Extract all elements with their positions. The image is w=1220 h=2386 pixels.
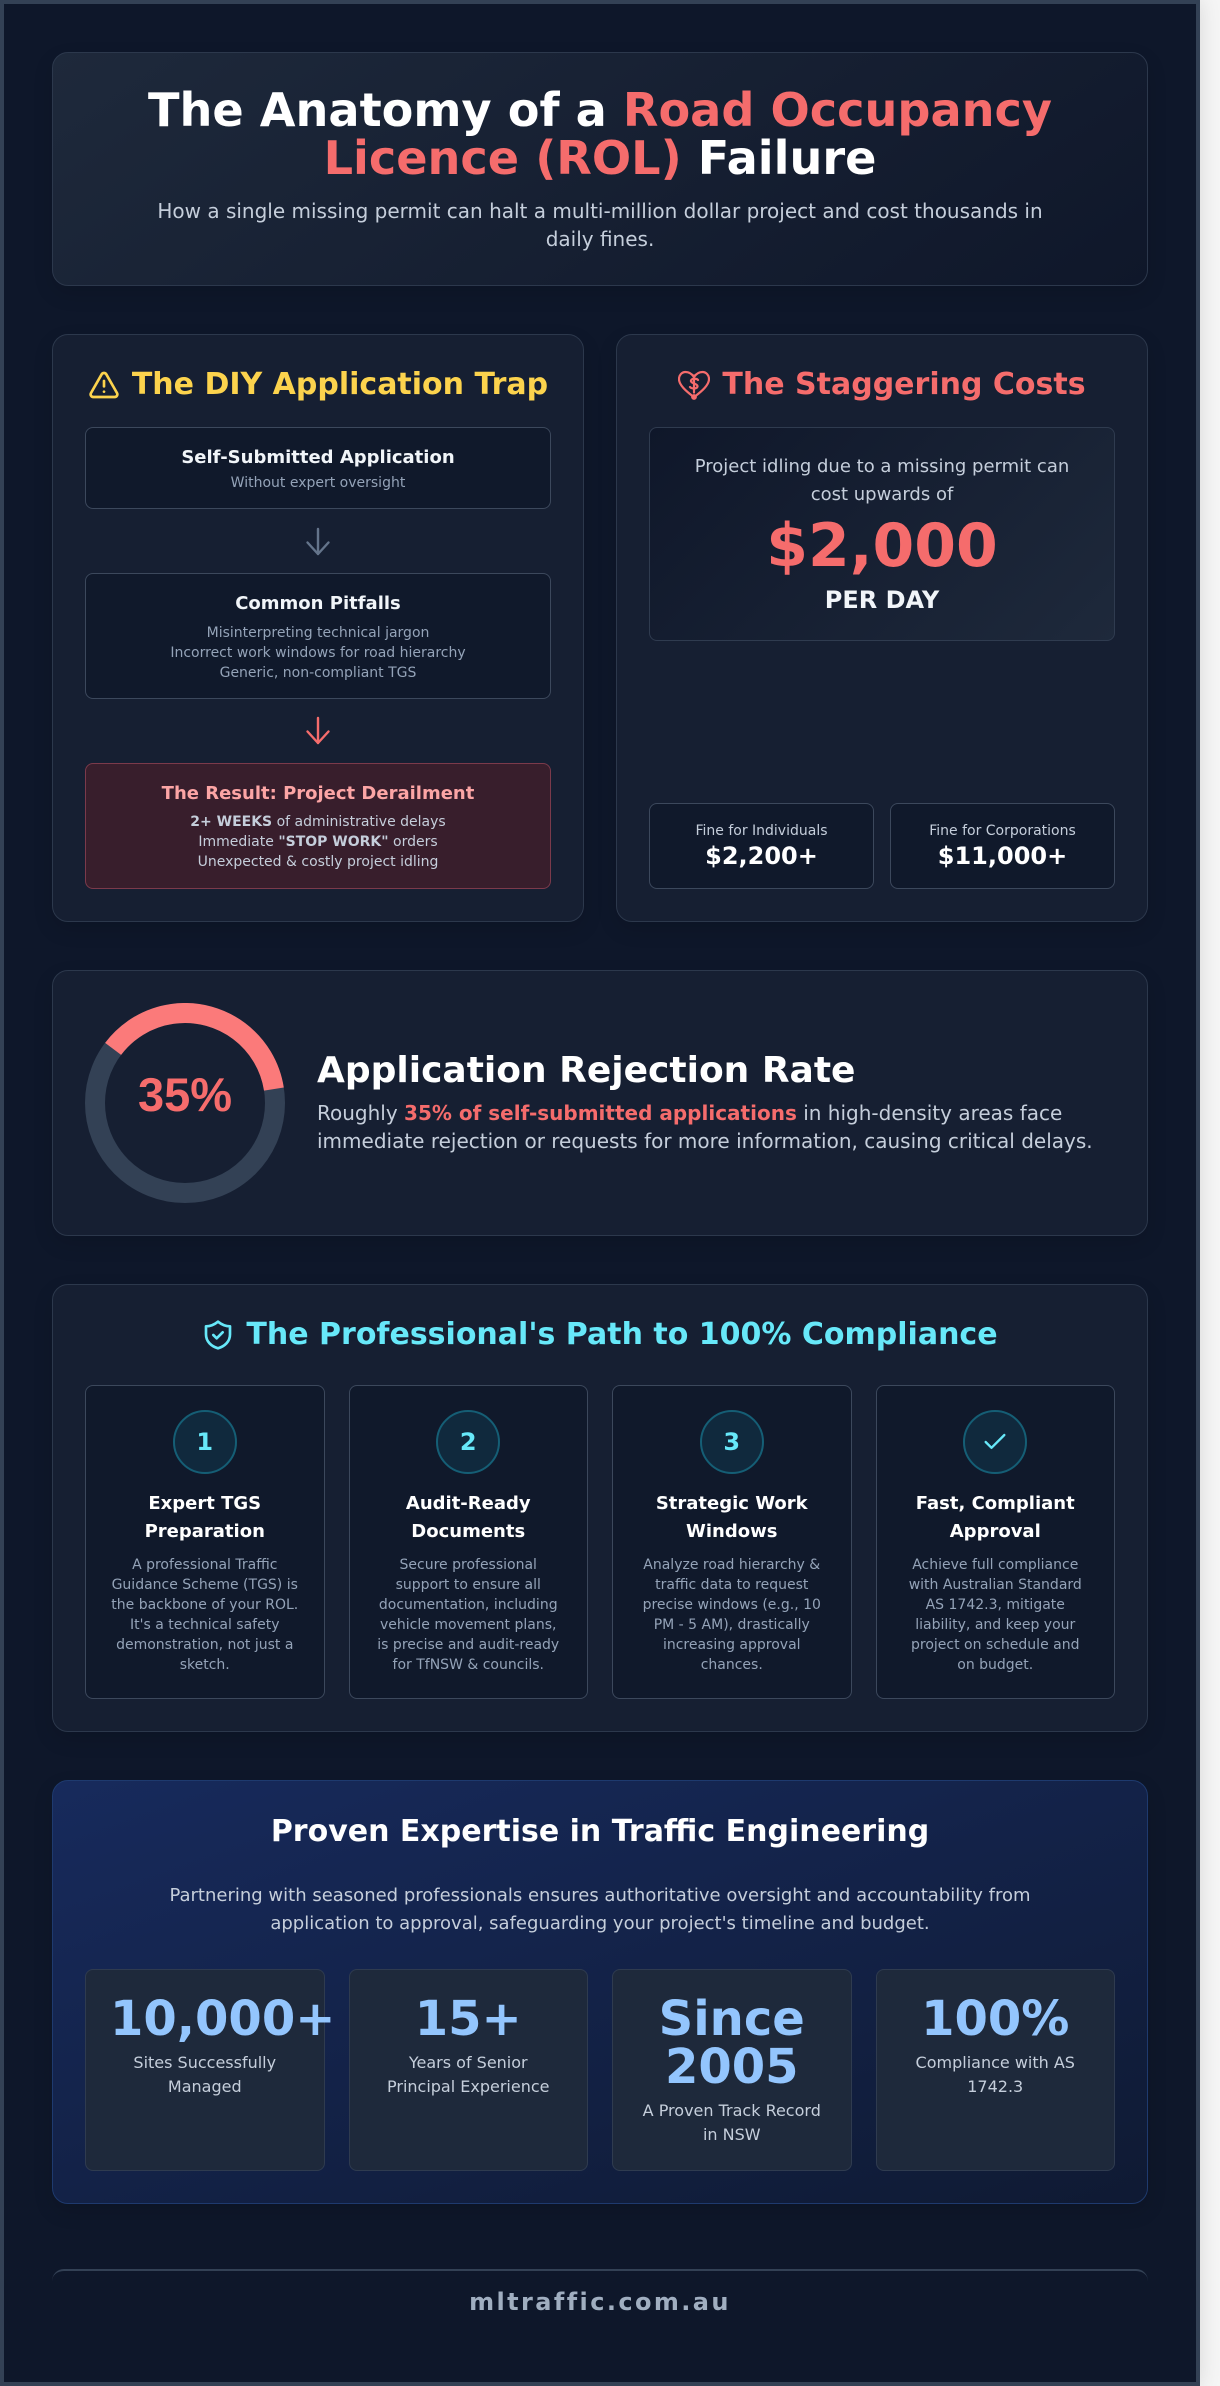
heading: DIY application trap: The DIY Application Trap: [132, 367, 548, 402]
stat: sites managed: Sites Successfully: [133, 2053, 276, 2072]
expertise text: [169, 1885, 1031, 1934]
flow step: project derailment result: [85, 763, 551, 889]
panel: DIY application trap: [52, 334, 584, 922]
step 2 card: documentation, including: [379, 1597, 558, 1613]
step 2 card: is precise and audit-ready: [377, 1637, 559, 1653]
step 1 card: Preparation: [145, 1521, 265, 1542]
website address: mltraffic.com.au: [469, 2288, 731, 2316]
step 3 card: traffic data to request: [655, 1577, 808, 1593]
step 3 card: increasing approval: [663, 1637, 801, 1653]
donut chart: 35 percent: [85, 1003, 285, 1203]
step 4 card: [876, 1385, 1115, 1699]
callout: cost per day: [649, 427, 1115, 641]
fine card: corporations: Fine for Corporations: [929, 823, 1076, 839]
panel: application rejection rate: [52, 970, 1148, 1236]
stat: years experience: [348, 1969, 588, 2171]
step 4 card: liability, and keep your: [915, 1617, 1075, 1633]
step 4 card: on budget.: [957, 1657, 1033, 1673]
fine card: corporations: [890, 803, 1115, 889]
per day label: PER DAY: [825, 586, 939, 614]
title: [148, 83, 1052, 185]
step 3 card: PM - 5 AM), drastically: [654, 1617, 810, 1633]
step 1 card: Expert TGS: [148, 1493, 261, 1514]
step 3 card: Analyze road hierarchy &: [643, 1557, 820, 1573]
heading: path to compliance: The Professional's Path to 100% Compliance: [246, 1317, 998, 1352]
step 1 card: demonstration, not just a: [116, 1637, 293, 1653]
fine card: individuals: [649, 803, 874, 889]
fine card: corporations: $11,000+: [938, 842, 1067, 870]
flow step: common pitfalls: Incorrect work windows for road hierarchy: [170, 645, 466, 661]
step 2 card: [348, 1385, 588, 1699]
stat: since 2005: A Proven Track Record: [643, 2101, 821, 2120]
flow step: common pitfalls: Misinterpreting technical jargon: [207, 625, 429, 641]
step 1 card: 1: [196, 1428, 213, 1456]
flow step: project derailment result: 2+ WEEKS of administrative delays: [190, 814, 446, 830]
step 2 card: Documents: [411, 1521, 525, 1542]
step 1 card: the backbone of your ROL.: [111, 1597, 298, 1613]
step 1 card: sketch.: [180, 1657, 230, 1673]
panel: proven expertise: [52, 1780, 1148, 2204]
step 2 card: Secure professional: [400, 1557, 537, 1573]
fine card: individuals: $2,200+: [705, 842, 818, 870]
flow step: common pitfalls: Generic, non-compliant TGS: [220, 665, 416, 681]
rejection heading: Application Rejection Rate: [317, 1050, 855, 1091]
stat: since 2005: in NSW: [703, 2125, 761, 2144]
fine card: individuals: Fine for Individuals: [695, 823, 828, 839]
step 1 card: [85, 1385, 324, 1699]
step 2 card: 2: [460, 1428, 477, 1456]
step 3 card: Strategic Work: [656, 1493, 808, 1514]
stat: since 2005: Since: [659, 1991, 805, 2047]
subtitle: How a single missing permit can halt a multi-million dollar project and cost thousands in: [157, 199, 1043, 223]
heading: staggering costs: The Staggering Costs: [722, 367, 1086, 402]
stat: since 2005: 2005: [665, 2039, 799, 2095]
big number: $2,000: [766, 511, 998, 581]
step 3 card: chances.: [701, 1657, 763, 1673]
stat: compliance: [876, 1969, 1115, 2171]
title: Licence (ROL) Failure: [324, 131, 876, 185]
subtitle: daily fines.: [546, 227, 654, 251]
step 2 card: support to ensure all: [396, 1577, 541, 1593]
subtitle: [157, 199, 1043, 251]
flow step: self-submitted application: Without expert oversight: [231, 475, 405, 491]
panel: header: [52, 52, 1148, 286]
step 1 card: Guidance Scheme (TGS) is: [112, 1577, 298, 1593]
expertise heading: Proven Expertise in Traffic Engineering: [271, 1814, 929, 1849]
rejection text: [317, 1101, 1093, 1153]
step 1 card: It's a technical safety: [130, 1617, 279, 1633]
arrow: down grey: [306, 528, 330, 556]
stat: sites managed: 10,000+: [110, 1991, 335, 2047]
expertise text: Partnering with seasoned professionals ensures authoritative oversight and accountability from: [169, 1885, 1031, 1906]
title: The Anatomy of a Road Occupancy: [148, 83, 1052, 137]
stat: years experience: 15+: [415, 1991, 522, 2047]
step 4 card: Approval: [950, 1521, 1041, 1542]
step 4 card: Achieve full compliance: [912, 1557, 1078, 1573]
expertise text: application to approval, safeguarding your project's timeline and budget.: [270, 1913, 930, 1934]
callout text: Project idling due to a missing permit can: [695, 456, 1069, 477]
step 3 card: [612, 1385, 852, 1699]
step 4 card: AS 1742.3, mitigate: [926, 1597, 1065, 1613]
callout text: cost upwards of: [811, 484, 953, 505]
step 4 card: Fast, Compliant: [916, 1493, 1075, 1514]
stat: sites managed: Managed: [168, 2077, 242, 2096]
panel: staggering costs: [616, 334, 1148, 922]
stat: sites managed: [85, 1969, 324, 2171]
flow step: project derailment result: The Result: Project Derailment: [162, 783, 474, 804]
flow step: project derailment result: Immediate "STOP WORK" orders: [198, 834, 438, 850]
flow step: self-submitted application: Self-Submitted Application: [181, 447, 455, 468]
step 3 card: precise windows (e.g., 10: [643, 1597, 821, 1613]
stat: years experience: Years of Senior: [409, 2053, 528, 2072]
step 2 card: for TfNSW & councils.: [393, 1657, 544, 1673]
flow step: common pitfalls: [85, 573, 551, 699]
step 2 card: Audit-Ready: [406, 1493, 531, 1514]
step 1 card: A professional Traffic: [132, 1557, 277, 1573]
flow step: self-submitted application: [85, 427, 551, 509]
callout text: [695, 456, 1069, 505]
donut chart: 35 percent: 35%: [138, 1068, 232, 1121]
step 4 card: project on schedule and: [911, 1637, 1079, 1653]
rejection text: Roughly 35% of self-submitted applications in high-density areas face: [317, 1101, 1062, 1125]
stat: compliance: 1742.3: [967, 2077, 1023, 2096]
step 2 card: vehicle movement plans,: [380, 1617, 556, 1633]
panel: professional path: [52, 1284, 1148, 1732]
arrow: down red: [306, 716, 330, 744]
flow step: common pitfalls: Common Pitfalls: [235, 593, 401, 614]
step 4 card: with Australian Standard: [909, 1577, 1082, 1593]
stat: since 2005: [612, 1969, 852, 2171]
flow step: project derailment result: Unexpected & costly project idling: [198, 854, 438, 870]
stat: years experience: Principal Experience: [387, 2077, 550, 2096]
stat: compliance: 100%: [921, 1991, 1069, 2047]
step 3 card: 3: [723, 1428, 740, 1456]
rejection text: immediate rejection or requests for more information, causing critical delays.: [317, 1129, 1093, 1153]
footer: [52, 2269, 1148, 2329]
step 3 card: Windows: [686, 1521, 777, 1542]
stat: compliance: Compliance with AS: [916, 2053, 1075, 2072]
